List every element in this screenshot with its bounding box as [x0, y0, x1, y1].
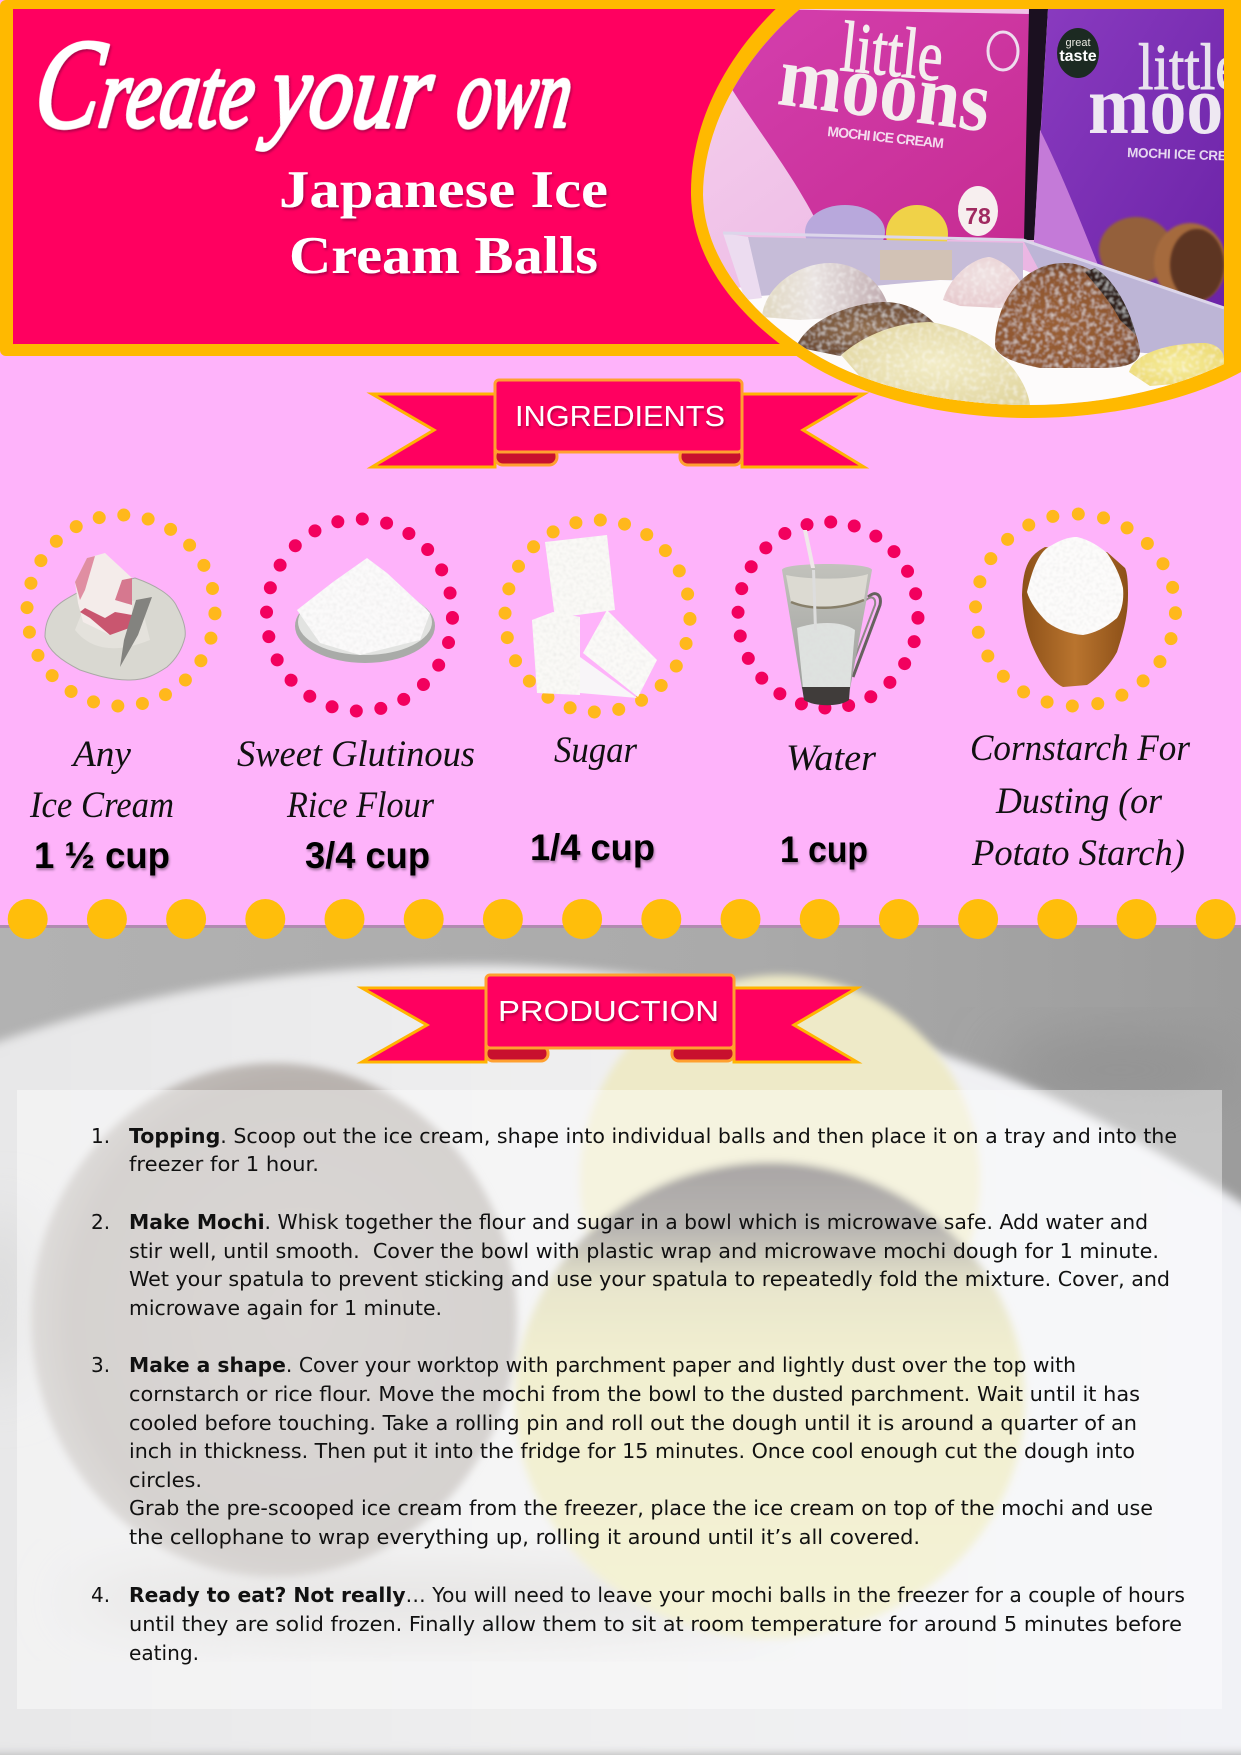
- step 1: freezer for 1 hour.: [129, 1152, 319, 1176]
- translucent text panel: [17, 1090, 1222, 1709]
- production heading: PRODUCTION: [498, 996, 719, 1028]
- dotted ring: [502, 517, 693, 715]
- production steps: [91, 1124, 1185, 1665]
- amount: 1 cup: [780, 829, 868, 870]
- production background photo: [0, 928, 1241, 1755]
- step 3: [91, 1353, 1153, 1549]
- dotted ring: [24, 512, 218, 709]
- step 3: cooled before touching. Take a rolling pin and roll out the dough until it is around a quarter of an: [129, 1411, 1137, 1435]
- ribbon tails: [372, 394, 864, 467]
- step 1: 1.: [91, 1124, 110, 1148]
- step 1: [91, 1124, 1177, 1176]
- ingredient 5: cornstarch: Dusting (or: [995, 781, 1163, 822]
- ribbon centre: [495, 380, 742, 452]
- ribbon tails: [362, 988, 857, 1062]
- dotted ring: [263, 516, 456, 714]
- product photo: [703, 9, 1224, 405]
- purple box: taste: [1059, 48, 1097, 65]
- magenta box: [732, 10, 1029, 242]
- step 3: the cellophane to wrap everything up, rolling it around until it’s all covered.: [129, 1525, 920, 1549]
- title: Create your own: Create: [27, 13, 266, 155]
- ingredients heading: INGREDIENTS: [515, 401, 725, 433]
- step 1: Topping. Scoop out the ice cream, shape into individual balls and then place it on a tray and into the: [129, 1124, 1177, 1148]
- step 3: circles.: [129, 1468, 202, 1492]
- amount: 3/4 cup: [305, 835, 430, 876]
- magenta box: MOCHI ICE CREAM: [827, 123, 945, 151]
- ingredient 5: cornstarch: Potato Starch): [971, 833, 1185, 874]
- icon: plate and ice cream: [45, 553, 185, 680]
- step 2: microwave again for 1 minute.: [129, 1296, 442, 1320]
- label: Water: [786, 738, 877, 779]
- subtitle: Japanese Ice Cream Balls: Cream Balls: [289, 227, 598, 285]
- ingredient 4: water: [735, 519, 921, 870]
- yellow frame of photo: [691, 0, 1241, 418]
- purple box: great: [1065, 37, 1091, 49]
- step 3: inch in thickness. Then put it into the fridge for 15 minutes. Once cool enough cut the dough into: [129, 1439, 1135, 1463]
- amount: 1 ½ cup: [34, 835, 170, 876]
- tray and floor: [723, 232, 1224, 405]
- amount: 1/4 cup: [530, 827, 655, 868]
- step 4: eating.: [129, 1641, 199, 1665]
- title: Create your own: [27, 13, 583, 155]
- step 3: 3.: [91, 1353, 110, 1377]
- ingredient 1: ice cream: Ice Cream: [29, 785, 174, 826]
- yellow dotted divider: [8, 899, 1236, 939]
- subtitle: Japanese Ice Cream Balls: [279, 161, 608, 285]
- step 3: Grab the pre-scooped ice cream from the freezer, place the ice cream on top of the mochi and use: [129, 1496, 1153, 1520]
- dotted ring: [735, 519, 921, 711]
- black gap between boxes: [1024, 9, 1048, 240]
- pink page background: [0, 0, 1241, 926]
- ribbon folds: [486, 1046, 734, 1061]
- ingredient 1: ice cream: [24, 512, 218, 876]
- header pink panel: [0, 0, 1000, 356]
- magenta box: 78: [965, 203, 991, 229]
- label: Sugar: [554, 730, 638, 771]
- label: Sweet Glutinous: [237, 734, 475, 775]
- ribbon: production: [362, 975, 857, 1062]
- header banner: [0, 0, 1241, 420]
- step 4: Ready to eat? Not really… You will need to leave your mochi balls in the freezer for a couple of hours: [129, 1583, 1185, 1607]
- icon: glass of water: [782, 530, 880, 705]
- label: Any: [70, 734, 132, 775]
- step 2: Wet your spatula to prevent sticking and use your spatula to repeatedly fold the mixture. Cover, and: [129, 1267, 1170, 1291]
- mochi balls: [762, 257, 1224, 405]
- magenta box: little: [837, 6, 947, 97]
- icon: sugar cubes: [532, 535, 657, 698]
- step 2: stir well, until smooth. Cover the bowl with plastic wrap and microwave mochi dough for 1 minute.: [129, 1239, 1159, 1263]
- magenta box: moons: [773, 28, 996, 152]
- purple box: [1034, 9, 1224, 306]
- step 2: Make Mochi. Whisk together the flour and sugar in a bowl which is microwave safe. Add water and: [129, 1210, 1148, 1234]
- ribbon folds: [495, 448, 742, 465]
- step 4: [91, 1583, 1185, 1665]
- step 4: until they are solid frozen. Finally allow them to sit at room temperature for around 5 minutes before: [129, 1612, 1182, 1636]
- title: Create your own: your: [256, 31, 441, 151]
- subtitle: Japanese Ice Cream Balls: Japanese Ice: [279, 161, 608, 219]
- yellow top and right frame: [780, 0, 1241, 372]
- step 3: Make a shape. Cover your worktop with parchment paper and lightly dust over the top with: [129, 1353, 1076, 1377]
- ribbon: ingredients: [372, 380, 864, 467]
- step 4: 4.: [91, 1583, 110, 1607]
- ingredient 5: cornstarch: [970, 511, 1191, 874]
- title: Create your own: own: [451, 37, 580, 149]
- label: Cornstarch For: [970, 728, 1191, 769]
- dotted ring: [972, 511, 1179, 709]
- icon: wooden bowl of starch: [1022, 537, 1128, 687]
- step 2: 2.: [91, 1210, 110, 1234]
- ingredient 2: rice flour: Rice Flour: [286, 785, 435, 826]
- ribbon centre: [486, 975, 734, 1048]
- step 2: [91, 1210, 1170, 1320]
- icon: flour in dish: [295, 558, 435, 663]
- ingredient 3: sugar: [502, 517, 693, 868]
- step 3: cornstarch or rice flour. Move the mochi from the bowl to the dusted parchment. Wait until it has: [129, 1382, 1140, 1406]
- ingredient 2: rice flour: [237, 516, 475, 876]
